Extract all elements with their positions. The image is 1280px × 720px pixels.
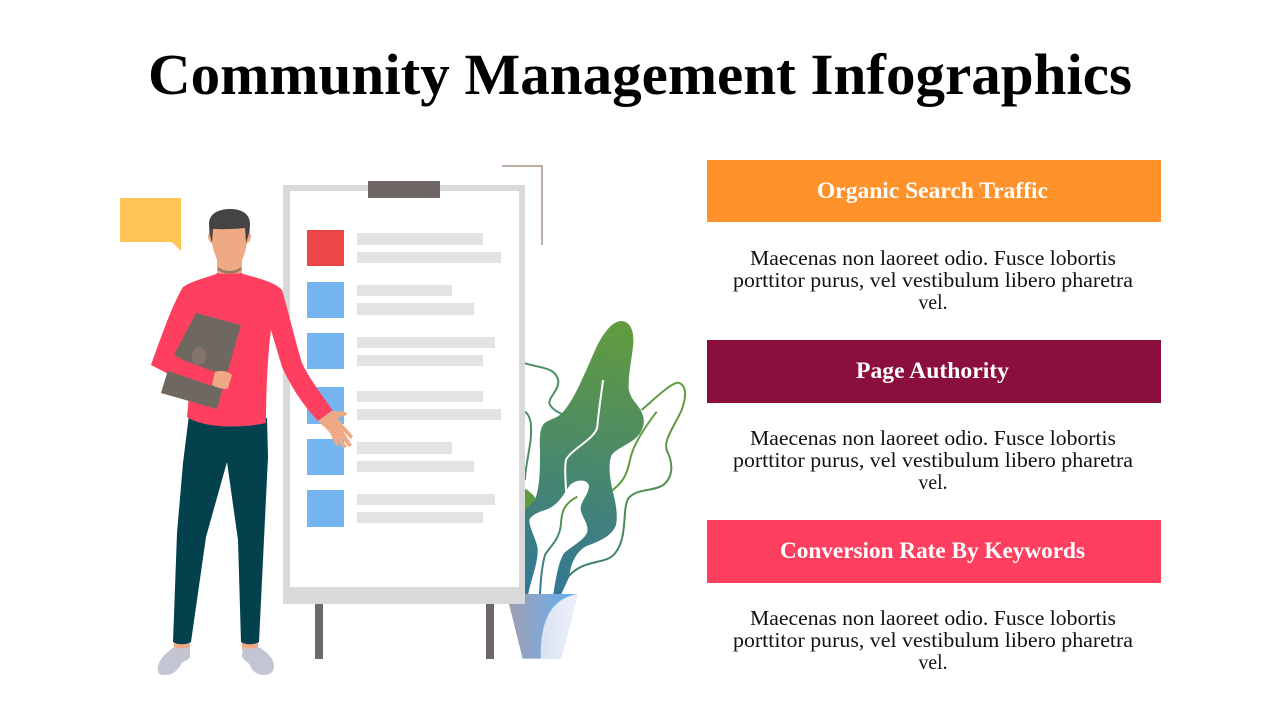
folder bbox=[161, 313, 241, 409]
forearm bbox=[151, 340, 215, 386]
chin shadow bbox=[218, 267, 241, 274]
right hand bbox=[318, 411, 353, 448]
panel: conversion rate by keywords bbox=[707, 520, 1161, 674]
white leaf vein bbox=[565, 380, 603, 492]
board legs bbox=[315, 600, 494, 659]
checklist squares bbox=[307, 230, 344, 527]
body text: Maecenas non laoreet odio. Fusce lobortis bbox=[750, 426, 1116, 450]
folder button bbox=[192, 347, 206, 365]
person bbox=[151, 209, 353, 675]
curved leaf outline right bbox=[568, 383, 685, 577]
header bar bbox=[707, 160, 1161, 222]
icon: speech bubble bbox=[120, 198, 181, 251]
board frame bbox=[283, 185, 525, 604]
body text: porttitor purus, vel vestibulum libero pharetra bbox=[733, 628, 1134, 652]
body text: Maecenas non laoreet odio. Fusce lobortis bbox=[750, 606, 1116, 630]
pot highlight bbox=[541, 594, 578, 659]
board clip bbox=[368, 181, 440, 198]
title: Community Management Infographics bbox=[148, 42, 1132, 107]
panel: organic search traffic bbox=[707, 160, 1161, 314]
heading: Conversion Rate By Keywords bbox=[780, 538, 1085, 563]
body text bbox=[733, 246, 1134, 314]
body text bbox=[733, 606, 1134, 674]
neck bbox=[217, 258, 242, 276]
curved leaf outline left bbox=[525, 412, 531, 480]
heading: Page Authority bbox=[856, 358, 1010, 383]
left shoe bbox=[158, 647, 190, 675]
body text: porttitor purus, vel vestibulum libero pharetra bbox=[733, 448, 1134, 472]
right shoe bbox=[242, 647, 274, 675]
checklist board bbox=[283, 181, 525, 604]
pot bbox=[509, 594, 578, 659]
panel: page authority bbox=[707, 340, 1161, 494]
body text: vel. bbox=[918, 290, 948, 314]
curved leaf outline upper left bbox=[525, 363, 562, 414]
body text: vel. bbox=[918, 650, 948, 674]
ankles bbox=[174, 640, 258, 650]
face bbox=[208, 226, 251, 271]
white gap in leaf bbox=[528, 480, 589, 594]
corner bracket bbox=[502, 166, 542, 245]
header bar bbox=[707, 520, 1161, 583]
body text: porttitor purus, vel vestibulum libero pharetra bbox=[733, 268, 1134, 292]
body text: Maecenas non laoreet odio. Fusce lobortis bbox=[750, 246, 1116, 270]
inner stem centre bbox=[540, 497, 577, 594]
body text: vel. bbox=[918, 470, 948, 494]
header bar bbox=[707, 340, 1161, 403]
small dark leaf bbox=[520, 487, 536, 512]
plant illustration bbox=[509, 321, 685, 659]
inner stem right bbox=[612, 412, 657, 491]
shirt bbox=[151, 273, 332, 427]
large leaf bbox=[520, 321, 644, 594]
checklist lines bbox=[357, 233, 501, 523]
left hand bbox=[212, 371, 232, 389]
body text bbox=[733, 426, 1134, 494]
trousers bbox=[173, 415, 268, 644]
heading: Organic Search Traffic bbox=[817, 178, 1048, 203]
hair bbox=[209, 209, 250, 243]
